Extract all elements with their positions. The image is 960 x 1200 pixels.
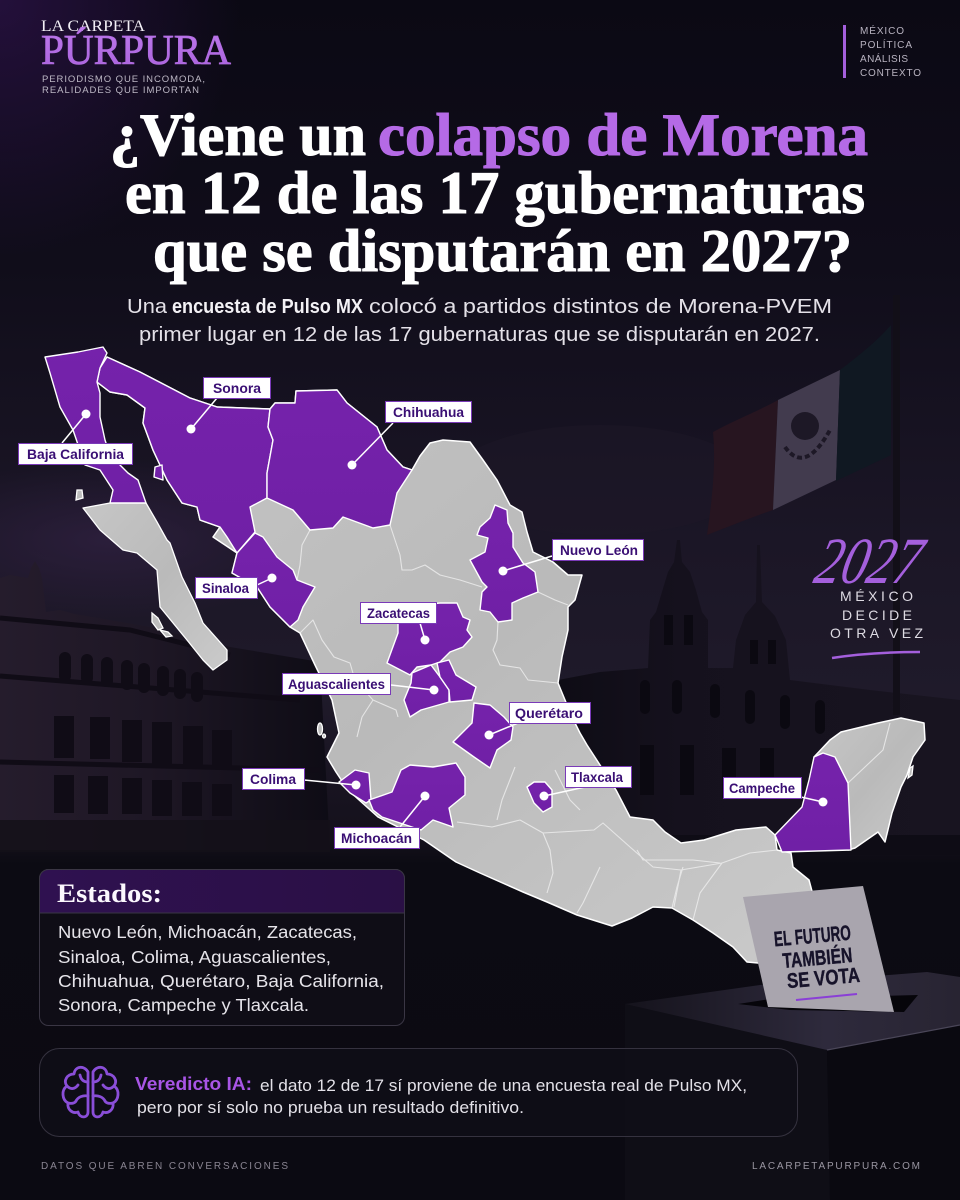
map: queretaro	[453, 703, 513, 768]
callout: chihuahua	[348, 402, 472, 470]
subtitle	[127, 295, 832, 346]
background: cathedral silhouette	[558, 540, 960, 855]
ballot box	[625, 972, 960, 1200]
map: sinaloa	[232, 533, 315, 627]
topic list: CONTEXTO	[860, 68, 921, 79]
panel header: estados: Estados:	[57, 879, 162, 908]
callout: tlaxcala	[540, 766, 632, 800]
callout: aguascalientes	[282, 674, 438, 694]
map: tlaxcala	[527, 782, 552, 812]
panel: veredicto ia	[40, 1048, 798, 1136]
ballot paper: el futuro tambien se vota	[743, 886, 894, 1012]
subtitle: Una	[127, 295, 168, 318]
ballot paper: el futuro tambien se vota: EL FUTURO	[773, 922, 852, 951]
text: veredicto	[135, 1074, 747, 1117]
callout: 2027 mexico decide otra vez: OTRA VEZ	[830, 625, 923, 641]
map: sonora	[97, 357, 273, 553]
logo: la carpeta purpura: REALIDADES QUE IMPORTAN	[42, 85, 199, 96]
subtitle: encuesta de Pulso MX	[172, 295, 363, 318]
subtitle: colocó a partidos distintos de Morena-PVEM	[369, 295, 832, 318]
map: nuevo leon	[470, 505, 538, 622]
callout: nuevo leon	[498, 540, 644, 576]
callout: aguascalientes: Aguascalientes	[288, 676, 385, 692]
map: campeche	[775, 753, 851, 852]
panel: estados	[40, 870, 404, 1026]
map: northern san luis region	[437, 660, 476, 702]
callout: sonora	[186, 378, 270, 434]
callout: 2027 mexico decide otra vez: MÉXICO	[840, 588, 913, 604]
map: baja california	[45, 347, 146, 503]
title: ¿Viene un	[110, 102, 366, 168]
callout: tlaxcala: Tlaxcala	[571, 769, 623, 785]
ballot paper: el futuro tambien se vota: TAMBIÉN	[782, 944, 853, 973]
text: list of states: Chihuahua, Querétaro, Baja California,	[58, 971, 384, 991]
text: list of states	[58, 922, 384, 1015]
callout: queretaro: Querétaro	[515, 705, 583, 721]
map: gray base territory	[97, 357, 830, 963]
text: list of states: Sinaloa, Colima, Aguascalientes,	[58, 947, 331, 967]
map: yucatan and quintana roo	[814, 718, 925, 850]
callout: sonora: Sonora	[213, 380, 261, 396]
callout: chihuahua: Chihuahua	[393, 404, 464, 420]
title: que se disputarán en 2027?	[153, 218, 852, 284]
logo: la carpeta purpura: LA CARPETA	[41, 18, 145, 35]
callout: nuevo leon: Nuevo León	[560, 542, 638, 558]
title: colapso de Morena	[378, 102, 868, 168]
map: colima	[339, 770, 371, 803]
map: chihuahua	[267, 390, 412, 530]
callout: zacatecas: Zacatecas	[367, 605, 430, 621]
callout: michoacan	[334, 792, 430, 848]
callout: campeche	[724, 778, 828, 806]
background: national palace silhouette	[0, 561, 330, 852]
callout: queretaro	[484, 702, 590, 740]
callout: zacatecas	[360, 602, 436, 644]
map of mexico	[18, 347, 925, 963]
topic list: ANÁLISIS	[860, 52, 908, 65]
topic list	[843, 24, 921, 79]
callout: michoacan: Michoacán	[341, 830, 412, 846]
topic list: POLÍTICA	[860, 38, 912, 51]
text: veredicto: Veredicto IA:	[135, 1074, 252, 1094]
logo: la carpeta purpura: PÚRPURA	[41, 27, 232, 74]
map: aguascalientes	[404, 665, 449, 717]
callout: colima	[242, 768, 360, 790]
map: islands	[76, 490, 913, 778]
text: veredicto: pero por sí solo no prueba un resultado definitivo.	[137, 1099, 524, 1117]
callout: 2027 mexico decide otra vez: DECIDE	[842, 607, 912, 623]
text: list of states: Sonora, Campeche y Tlaxcala.	[58, 995, 309, 1015]
logo: la carpeta purpura	[41, 18, 232, 96]
callout: colima: Colima	[250, 771, 296, 787]
panel header: estados	[40, 870, 404, 913]
subtitle: primer lugar en 12 de las 17 gubernaturas que se disputarán en 2027.	[139, 323, 820, 346]
title: en 12 de las 17 gubernaturas	[125, 160, 865, 226]
map: tiburon island	[154, 465, 163, 480]
callout: baja california: Baja California	[27, 446, 124, 462]
background: mexican flag and pole	[707, 295, 900, 715]
callout: sinaloa: Sinaloa	[202, 580, 249, 596]
map: internal state boundaries	[297, 525, 890, 920]
footer right: LACARPETAPURPURA.COM	[752, 1161, 920, 1172]
callout: 2027 mexico decide otra vez: 2027	[808, 525, 932, 598]
title	[110, 102, 868, 284]
ballot paper: el futuro tambien se vota: SE VOTA	[786, 964, 861, 993]
callout: sinaloa	[196, 574, 276, 598]
icon: brain	[63, 1067, 118, 1117]
text: list of states: Nuevo León, Michoacán, Zacatecas,	[58, 922, 357, 942]
callout: campeche: Campeche	[729, 780, 795, 796]
logo: la carpeta purpura: PERIODISMO QUE INCOMODA,	[42, 74, 205, 85]
map: baja california sur	[83, 503, 227, 670]
callout: 2027 mexico decide otra vez	[808, 525, 932, 658]
callout: baja california	[18, 410, 132, 464]
footer left: DATOS QUE ABREN CONVERSACIONES	[41, 1161, 288, 1172]
topic list: MÉXICO	[860, 24, 904, 37]
map: zacatecas	[387, 603, 472, 675]
map: michoacan	[369, 763, 465, 830]
text: veredicto: el dato 12 de 17 sí proviene de una encuesta real de Pulso MX,	[260, 1077, 747, 1095]
